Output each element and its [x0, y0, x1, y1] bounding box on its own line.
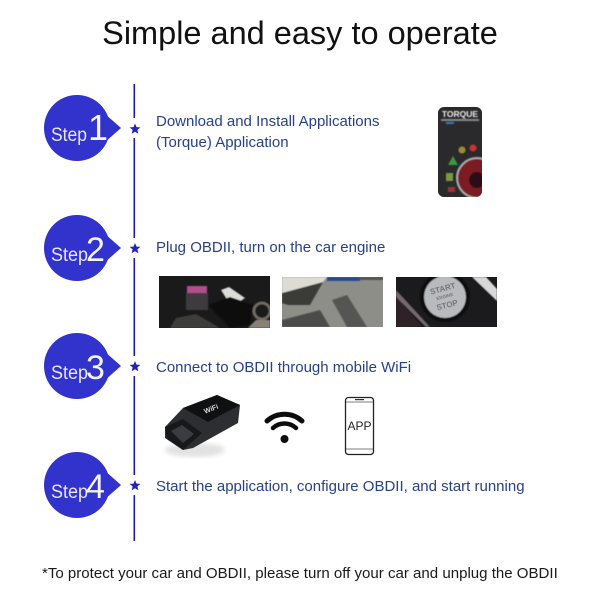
- step 2 marker: 2: [86, 231, 105, 269]
- step 2 marker: [44, 215, 140, 281]
- step 4 marker: Step: [51, 482, 88, 503]
- torque app phone image: [438, 107, 482, 197]
- photo: pedals: [282, 277, 383, 327]
- icon: OBDII adapter: WiFi: [203, 404, 220, 416]
- step 4 marker: [44, 452, 140, 518]
- step 1 marker: 1: [88, 107, 108, 148]
- step 1 text: Download and Install Applications: [156, 113, 379, 130]
- step 4 marker: 4: [86, 468, 105, 506]
- photo: start stop button: ENGINE: [436, 292, 454, 301]
- icon: wifi: [267, 414, 302, 443]
- step 4 text: Start the application, configure OBDII, and start running: [156, 478, 525, 495]
- photo: OBD port: [159, 276, 270, 328]
- step 3 marker: Step: [51, 363, 88, 384]
- step 1 text: (Torque) Application: [156, 134, 289, 151]
- icon: OBDII adapter: [165, 395, 240, 457]
- step 3 marker: 3: [86, 349, 105, 387]
- footnote: *To protect your car and OBDII, please turn off your car and unplug the OBDII: [42, 565, 558, 582]
- step 2 text: Plug OBDII, turn on the car engine: [156, 239, 385, 256]
- timeline line: [134, 84, 135, 541]
- step 3 marker: [44, 333, 140, 399]
- torque app phone image: TORQUE: [442, 109, 478, 119]
- photo: start stop button: START: [429, 281, 457, 297]
- title: Simple and easy to operate: [102, 15, 498, 51]
- photo: start stop button: [396, 272, 497, 327]
- step 1 marker: [44, 95, 140, 161]
- step 2 marker: Step: [51, 245, 88, 266]
- icon: phone with APP: [346, 398, 374, 454]
- photo: start stop button: STOP: [436, 298, 459, 312]
- icon: phone with APP: APP: [347, 419, 372, 433]
- step 3 text: Connect to OBDII through mobile WiFi: [156, 359, 411, 376]
- step 1 marker: Step: [51, 125, 87, 146]
